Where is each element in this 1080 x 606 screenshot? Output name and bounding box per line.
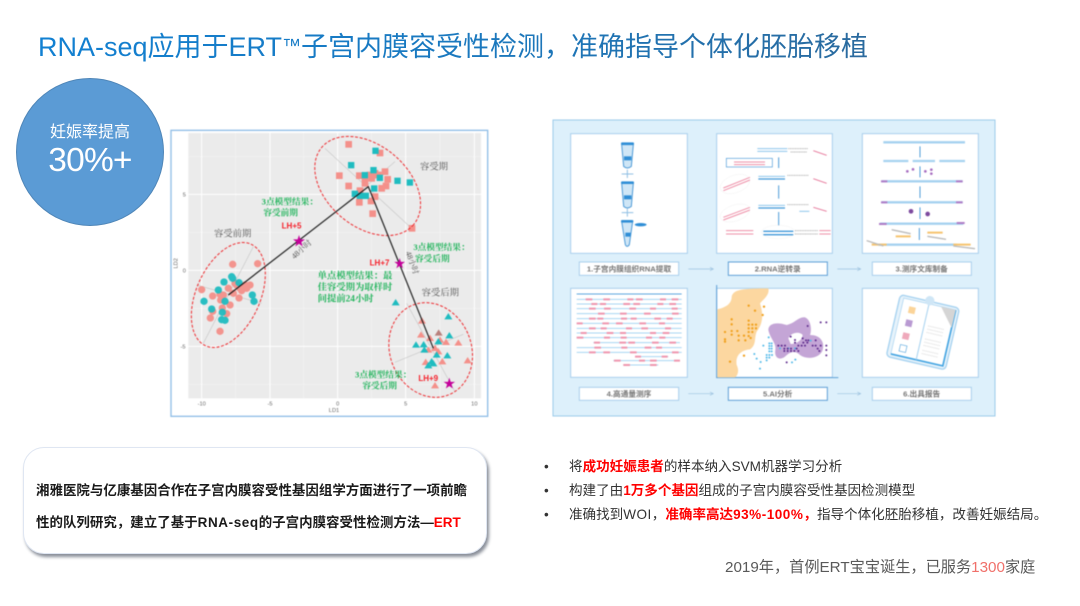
axis ticks and labels: -10	[198, 401, 206, 407]
step 2: reverse transcription card	[717, 134, 832, 253]
chart annotations: 48小时	[289, 237, 314, 261]
text box: study summary: 湘雅医院与亿康基因合作在子宫内膜容受性基因组学方面进行了一项前瞻	[36, 483, 467, 498]
chart annotations: 单点模型结果：最	[318, 269, 393, 281]
step 6: report card	[862, 288, 978, 377]
chart annotations: 容受前期	[263, 207, 298, 218]
axis ticks and labels: 10	[471, 401, 477, 407]
step labels row 1	[579, 262, 971, 275]
footer note: 2019年，首例ERT宝宝诞生，已服务1300家庭	[725, 559, 1035, 576]
dashed cluster ellipses	[176, 116, 486, 410]
panel: RNA-seq workflow	[552, 119, 996, 417]
chart annotations: 容受期	[420, 160, 448, 172]
text box: study summary: 性的队列研究，建立了基于RNA-seq的子宫内膜容受性检测方法—ERT	[36, 515, 461, 530]
axis ticks and labels: 0	[336, 401, 339, 407]
bullet list: key findings: •	[544, 483, 549, 498]
axis ticks and labels: 5	[183, 192, 186, 198]
step labels row 2: 4.高通量测序	[607, 388, 652, 398]
axis ticks and labels: LD1	[329, 408, 339, 414]
chart annotations: 3点模型结果：	[355, 368, 411, 379]
bullet list: key findings: 构建了由1万多个基因组成的子宫内膜容受性基因检测模型	[569, 483, 915, 498]
chart annotations: 3点模型结果：	[413, 241, 470, 252]
step labels row 2	[579, 387, 971, 400]
step labels row 2: 6.出具报告	[903, 388, 941, 398]
chart annotations: 容受后期	[362, 379, 397, 390]
callout: pregnancy rate circle: 30%+	[48, 142, 132, 179]
text box: study summary	[23, 447, 487, 554]
axis ticks and labels: 0	[183, 268, 186, 274]
cluster: receptive squares	[336, 141, 415, 232]
step 5: AI analysis card	[717, 285, 838, 378]
title: RNA-seq应用于ERT™子宫内膜容受性检测，准确指导个体化胚胎移植	[38, 32, 868, 62]
axis ticks and labels: LD2	[174, 258, 180, 269]
trajectory line	[228, 187, 433, 348]
chart annotations: 容受后期	[422, 287, 459, 299]
bullet list: key findings: 准确找到WOI，准确率高达93%-100%，指导个体化胚胎移植，改善妊娠结局。	[569, 507, 1047, 522]
stars	[293, 235, 455, 389]
callout: pregnancy rate circle	[16, 78, 164, 226]
bullet list: key findings	[544, 459, 1047, 522]
chart annotations: LH+5	[282, 221, 302, 230]
chart annotations: LH+9	[418, 374, 439, 383]
chart annotations: 间提前24小时	[318, 293, 374, 305]
axis ticks and labels: -5	[267, 401, 273, 407]
ellipse axes	[197, 148, 463, 392]
step arrows row 2	[688, 392, 861, 395]
cluster: pre-receptive circles	[198, 260, 261, 335]
chart annotations: 3点模型结果：	[262, 195, 318, 206]
callout: pregnancy rate circle: 妊娠率提高	[50, 124, 130, 141]
step labels row 1: 2.RNA逆转录	[755, 263, 801, 273]
chart annotations: 佳容受期为取样时	[318, 281, 393, 293]
chart annotations: 容受后期	[415, 253, 450, 264]
axis ticks and labels	[174, 192, 477, 414]
step labels row 2: 5.AI分析	[763, 388, 793, 398]
step 3: library preparation card	[862, 134, 978, 253]
chart annotations: LH+7	[370, 259, 390, 268]
bullet list: key findings: •	[544, 459, 549, 474]
bullet list: key findings: •	[544, 507, 549, 522]
bullet list: key findings: 将成功妊娠患者的样本纳入SVM机器学习分析	[569, 459, 842, 474]
step labels row 1: 3.测序文库制备	[896, 263, 948, 273]
chart annotations: 容受前期	[214, 228, 251, 240]
cluster: post-receptive triangles	[417, 317, 472, 388]
axis ticks and labels: 5	[404, 401, 407, 407]
step arrows row 1	[688, 267, 861, 271]
chart: LDA scatter plot of endometrial receptivity	[170, 129, 489, 418]
step 4: high-throughput sequencing card	[571, 288, 687, 377]
step 1: RNA extraction card	[571, 134, 687, 253]
step labels row 1: 1.子宫内膜组织RNA提取	[587, 263, 671, 273]
chart annotations: 48小时	[404, 250, 421, 276]
axis ticks and labels: -5	[180, 344, 186, 350]
chart annotations	[214, 160, 470, 390]
